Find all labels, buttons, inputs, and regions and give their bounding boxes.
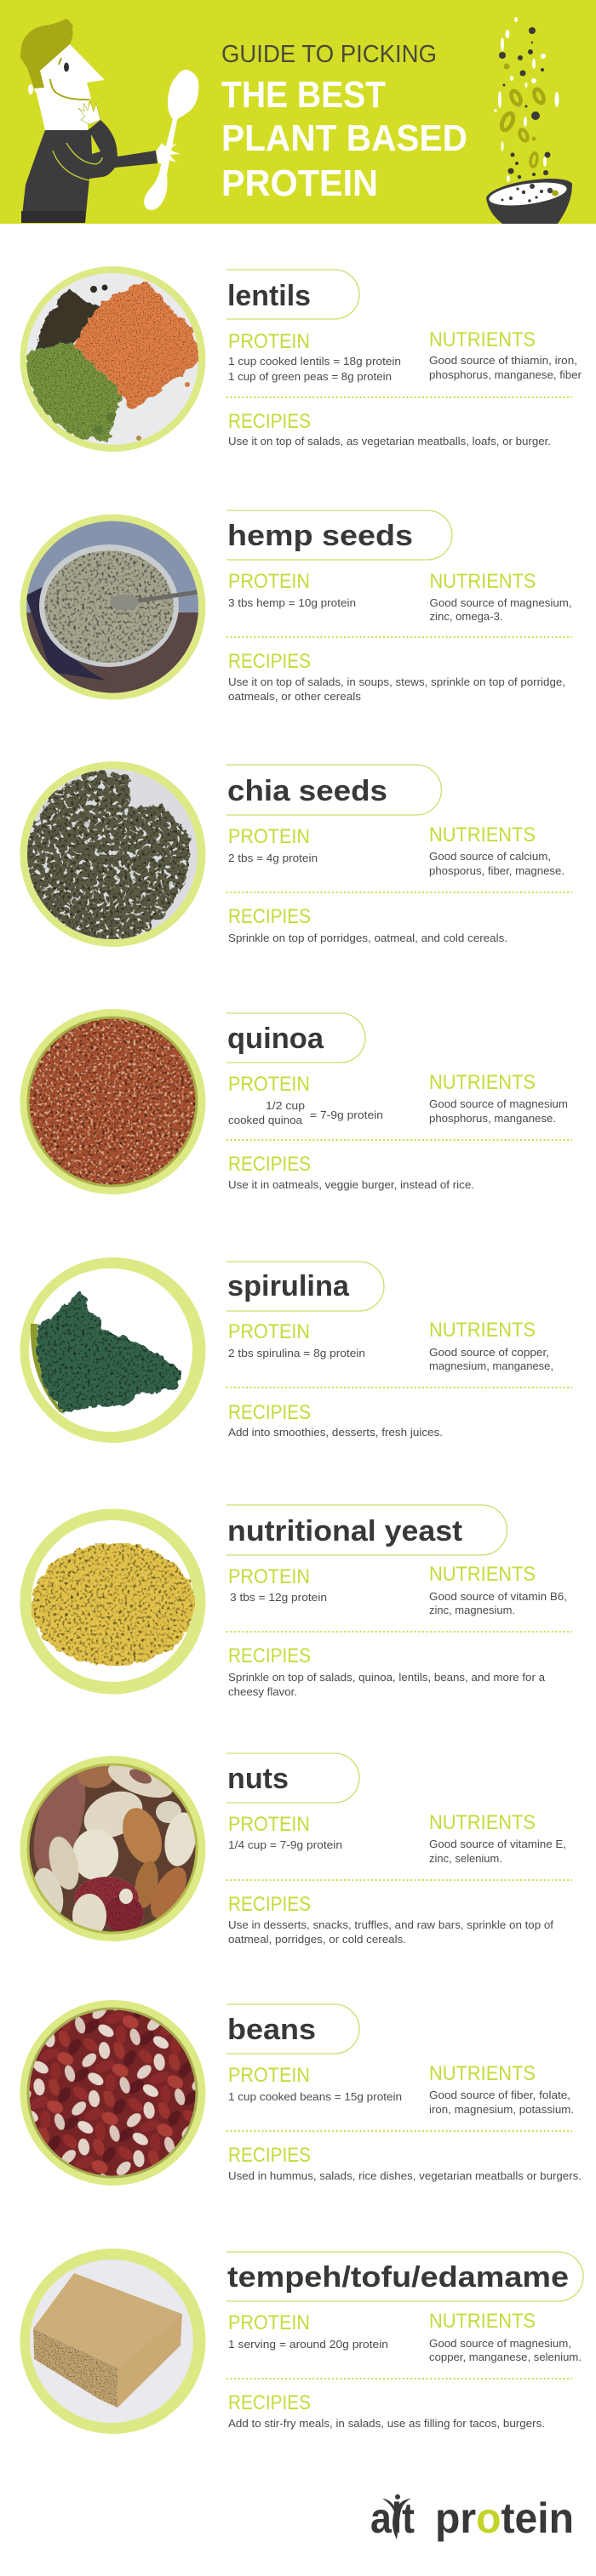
protein: chia seeds: PROTEIN [228,825,310,848]
nutrients: spirulina: magnesium, manganese, [429,1360,553,1372]
protein: lentils: 1 cup cooked lentils = 18g protein [228,356,401,368]
protein: nutritional yeast: PROTEIN [228,1565,310,1588]
recipes: lentils [228,410,551,447]
nutrients: chia seeds: phosporus, fiber, magnese. [429,865,564,877]
protein: tempeh/tofu/edamame [228,2311,388,2351]
protein: quinoa [228,1073,383,1126]
nutrients: nutritional yeast [429,1563,567,1616]
title [221,41,467,204]
name banner: tempeh/tofu/edamame [226,2252,583,2301]
name banner: quinoa: quinoa [227,1023,324,1055]
panel: hemp seeds [20,510,572,703]
nutrients: lentils: Good source of thiamin, iron, [429,355,577,367]
panel: lentils [20,266,582,452]
logo: alt protein: alt [370,2494,415,2542]
panel: chia seeds [20,761,572,947]
protein: tempeh/tofu/edamame: PROTEIN [228,2311,310,2334]
protein: lentils: PROTEIN [228,330,310,353]
spoon [144,70,198,210]
protein: quinoa: cooked quinoa [228,1114,302,1126]
photo: beans [20,2000,206,2186]
nutrients: nuts: NUTRIENTS [429,1811,536,1834]
protein: spirulina: PROTEIN [228,1320,310,1343]
panel: tempeh/tofu/edamame [20,2248,583,2434]
nutrients: nuts: zinc, selenium. [429,1853,502,1865]
title: PLANT BASED [221,117,467,159]
name banner: lentils [226,270,359,319]
nutrients: chia seeds: NUTRIENTS [429,824,536,846]
name banner: spirulina [226,1262,384,1311]
nutrients: beans: NUTRIENTS [429,2062,536,2085]
nutrients: lentils: phosphorus, manganese, fiber [429,369,582,381]
recipes: chia seeds: Sprinkle on top of porridges, oatmeal, and cold cereals. [228,932,507,944]
recipes: nuts: Use in desserts, snacks, truffles, and raw bars, sprinkle on top of [228,1919,554,1931]
protein: spirulina [228,1320,365,1359]
recipes: beans [228,2144,582,2182]
protein: hemp seeds: PROTEIN [228,570,310,593]
logo: alt protein: protein [435,2494,574,2542]
nutrients: lentils [429,328,582,381]
nutrients: tempeh/tofu/edamame: Good source of magnesium, [429,2338,571,2350]
panel: nuts [20,1753,572,1946]
recipes: spirulina [228,1401,443,1439]
name banner: hemp seeds: hemp seeds [227,520,413,552]
protein: tempeh/tofu/edamame: 1 serving = around 20g protein [228,2339,388,2351]
name banner: beans [226,2004,359,2054]
title: GUIDE TO PICKING [221,41,437,68]
panel: spirulina [20,1257,572,1443]
nutrients: tempeh/tofu/edamame: copper, manganese, selenium. [429,2351,582,2363]
protein: nuts [228,1813,342,1851]
nutrients: hemp seeds [429,570,572,623]
nutrients: tempeh/tofu/edamame [429,2310,582,2363]
recipes: nutritional yeast: RECIPIES [228,1644,311,1667]
nutrients: quinoa: phosphorus, manganese. [429,1113,556,1125]
recipes: spirulina: RECIPIES [228,1401,311,1424]
recipes: lentils: Use it on top of salads, as vegetarian meatballs, loafs, or burger. [228,436,551,447]
photo: spirulina [20,1257,206,1443]
photo: lentils [20,266,206,452]
nutrients: beans: iron, magnesium, potassium. [429,2104,574,2116]
nutrients: nutritional yeast: NUTRIENTS [429,1563,536,1586]
nutrients: quinoa: NUTRIENTS [429,1071,536,1094]
recipes: beans: RECIPIES [228,2144,311,2167]
protein: lentils: 1 cup of green peas = 8g protein [228,371,392,383]
title: THE BEST [221,74,386,116]
protein: lentils [228,330,401,383]
recipes: hemp seeds: oatmeals, or other cereals [228,691,361,703]
nutrients: nutritional yeast: Good source of vitamin B6, [429,1591,567,1603]
protein: chia seeds: 2 tbs = 4g protein [228,852,318,864]
name banner: nutritional yeast: nutritional yeast [227,1515,462,1547]
protein: chia seeds [228,825,318,864]
recipes: chia seeds: RECIPIES [228,905,311,928]
nutrients: beans [429,2062,574,2116]
name banner: lentils: lentils [227,280,311,312]
name banner: tempeh/tofu/edamame: tempeh/tofu/edamame [227,2261,569,2294]
recipes: hemp seeds: Use it on top of salads, in soups, stews, sprinkle on top of porridge, [228,676,565,688]
recipes: beans: Used in hummus, salads, rice dishes, vegetarian meatballs or burgers. [228,2170,582,2182]
protein: quinoa: 1/2 cup [266,1100,305,1112]
recipes: quinoa: RECIPIES [228,1153,311,1176]
protein: nuts: PROTEIN [228,1813,310,1836]
recipes: tempeh/tofu/edamame [228,2391,545,2430]
recipes: quinoa: Use it in oatmeals, veggie burger, instead of rice. [228,1179,474,1191]
panel: quinoa [20,1009,572,1194]
protein: quinoa: PROTEIN [228,1073,310,1096]
protein: spirulina: 2 tbs spirulina = 8g protein [228,1348,365,1359]
name banner: nuts: nuts [227,1763,289,1795]
panel: beans [20,2000,582,2186]
nutrients: beans: Good source of fiber, folate, [429,2089,570,2101]
nutrients: lentils: NUTRIENTS [429,328,536,351]
nutrients: hemp seeds: zinc, omega-3. [429,611,502,623]
recipes: lentils: RECIPIES [228,410,311,433]
photo: tempeh block [20,2248,206,2434]
nutrients: nutritional yeast: zinc, magnesium. [429,1604,515,1616]
nutrients: quinoa [429,1071,568,1125]
name banner: nuts [226,1753,359,1803]
nutrients: hemp seeds: NUTRIENTS [429,570,536,593]
name banner: beans: beans [227,2014,316,2046]
nutrients: chia seeds: Good source of calcium, [429,851,551,863]
recipes: tempeh/tofu/edamame: RECIPIES [228,2391,311,2414]
recipes: hemp seeds: RECIPIES [228,650,311,673]
illustration: bowl with falling beans [486,17,572,224]
recipes: tempeh/tofu/edamame: Add to stir-fry meals, in salads, use as filling for tacos, burgers. [228,2418,545,2430]
title: PROTEIN [221,162,378,204]
nutrients: quinoa: Good source of magnesium [429,1098,568,1110]
recipes: nuts: oatmeal, porridges, or cold cereals. [228,1934,406,1946]
recipes: nutritional yeast: Sprinkle on top of salads, quinoa, lentils, beans, and more for a [228,1672,545,1684]
protein: beans [228,2064,402,2103]
nutrients: spirulina: NUTRIENTS [429,1319,536,1342]
recipes: chia seeds [228,905,507,944]
panel: nutritional yeast [20,1505,572,1698]
nutrients: spirulina [429,1319,553,1372]
protein: quinoa: = 7-9g protein [310,1109,383,1121]
protein: beans: 1 cup cooked beans = 15g protein [228,2091,402,2103]
nutrients: hemp seeds: Good source of magnesium, [429,597,572,609]
protein: hemp seeds: 3 tbs hemp = 10g protein [228,597,356,609]
illustration: man holding spoon [20,19,198,223]
recipes: nutritional yeast [228,1644,545,1698]
recipes: nuts: RECIPIES [228,1893,311,1916]
name banner: chia seeds [226,765,441,815]
photo: nutritional yeast [20,1509,206,1695]
photo: hemp seeds [20,514,206,699]
photo: chia seeds [20,761,206,947]
name banner: spirulina: spirulina [227,1270,350,1302]
protein: hemp seeds [228,570,356,609]
nutrients: nuts [429,1811,566,1865]
nutrients: spirulina: Good source of copper, [429,1347,549,1359]
protein: nuts: 1/4 cup = 7-9g protein [228,1839,342,1851]
photo: nuts [20,1754,206,1941]
nutrients: tempeh/tofu/edamame: NUTRIENTS [429,2310,536,2333]
recipes: nutritional yeast: cheesy flavor. [228,1686,297,1698]
protein: nutritional yeast: 3 tbs = 12g protein [230,1592,327,1604]
name banner: nutritional yeast [226,1505,507,1555]
recipes: quinoa [228,1153,474,1191]
protein: nutritional yeast [228,1565,327,1604]
header banner [0,0,596,224]
recipes: nuts [228,1893,554,1946]
name banner: hemp seeds [226,510,452,560]
name banner: chia seeds: chia seeds [227,775,387,807]
name banner: quinoa [226,1013,365,1063]
recipes: spirulina: Add into smoothies, desserts, fresh juices. [228,1427,443,1439]
protein: beans: PROTEIN [228,2064,310,2087]
nutrients: chia seeds [429,824,564,877]
recipes: hemp seeds [228,650,565,703]
nutrients: nuts: Good source of vitamine E, [429,1838,566,1850]
logo: alt protein [370,2494,574,2542]
photo: quinoa [20,1009,206,1194]
